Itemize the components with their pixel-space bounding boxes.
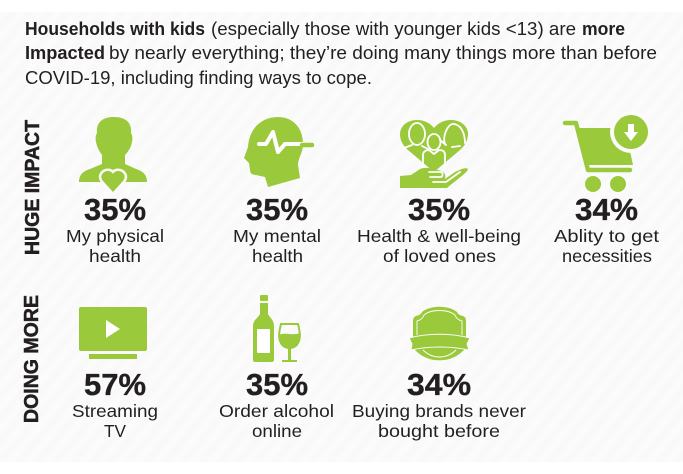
label: health [252, 246, 303, 266]
stat: streaming tv [72, 307, 158, 441]
icon: family in heart on hand [400, 120, 468, 188]
heading text: (especially those with younger kids <13) are [211, 19, 576, 39]
heading text: Impacted [25, 43, 105, 63]
stat: ability to get necessities [554, 111, 659, 266]
value: 35% [246, 367, 308, 402]
icon: wine bottle and glass [253, 295, 300, 362]
label: TV [104, 421, 126, 441]
label: of loved ones [383, 246, 496, 266]
heading text: Households with kids [25, 19, 205, 39]
value: 35% [246, 192, 308, 227]
stat: buying brands never bought before [352, 307, 526, 441]
label [352, 401, 526, 441]
icon: shopping cart with download [565, 111, 652, 192]
value: 57% [84, 367, 146, 402]
icon: tv with play button [79, 307, 147, 359]
label: Streaming [72, 401, 158, 421]
icon: head with pulse [244, 117, 312, 187]
label [219, 401, 334, 441]
label: health [89, 246, 141, 266]
label [66, 226, 164, 266]
label: Health & well-being [357, 226, 521, 246]
label: online [252, 421, 302, 441]
label: bought before [378, 421, 500, 441]
label [554, 226, 659, 266]
stat: my mental health [233, 117, 321, 266]
stat: order alcohol online [219, 295, 334, 441]
label: necessities [562, 246, 652, 266]
section label: doing more: DOING MORE [21, 295, 43, 423]
heading text [25, 19, 657, 88]
stat: my physical health [66, 117, 164, 266]
heading text: COVID-19, including finding ways to cope. [25, 68, 372, 88]
value: 34% [575, 192, 638, 227]
value: 34% [407, 367, 471, 402]
label: Ablity to get [554, 226, 659, 246]
label: My mental [233, 226, 321, 246]
label: Order alcohol [219, 401, 334, 421]
heading text: more [582, 19, 625, 39]
label [357, 226, 521, 266]
stat: health and well-being of loved ones [357, 120, 521, 266]
label [72, 401, 158, 441]
label: Buying brands never [352, 401, 526, 421]
label [233, 226, 321, 266]
value: 35% [84, 192, 146, 227]
icon: badge with ribbon [409, 307, 470, 360]
section label: huge impact: HUGE IMPACT [22, 120, 44, 255]
icon: person with heart [79, 117, 147, 192]
label: My physical [66, 226, 164, 246]
heading text: by nearly everything; they’re doing many things more than before [109, 43, 657, 63]
value: 35% [408, 192, 470, 227]
